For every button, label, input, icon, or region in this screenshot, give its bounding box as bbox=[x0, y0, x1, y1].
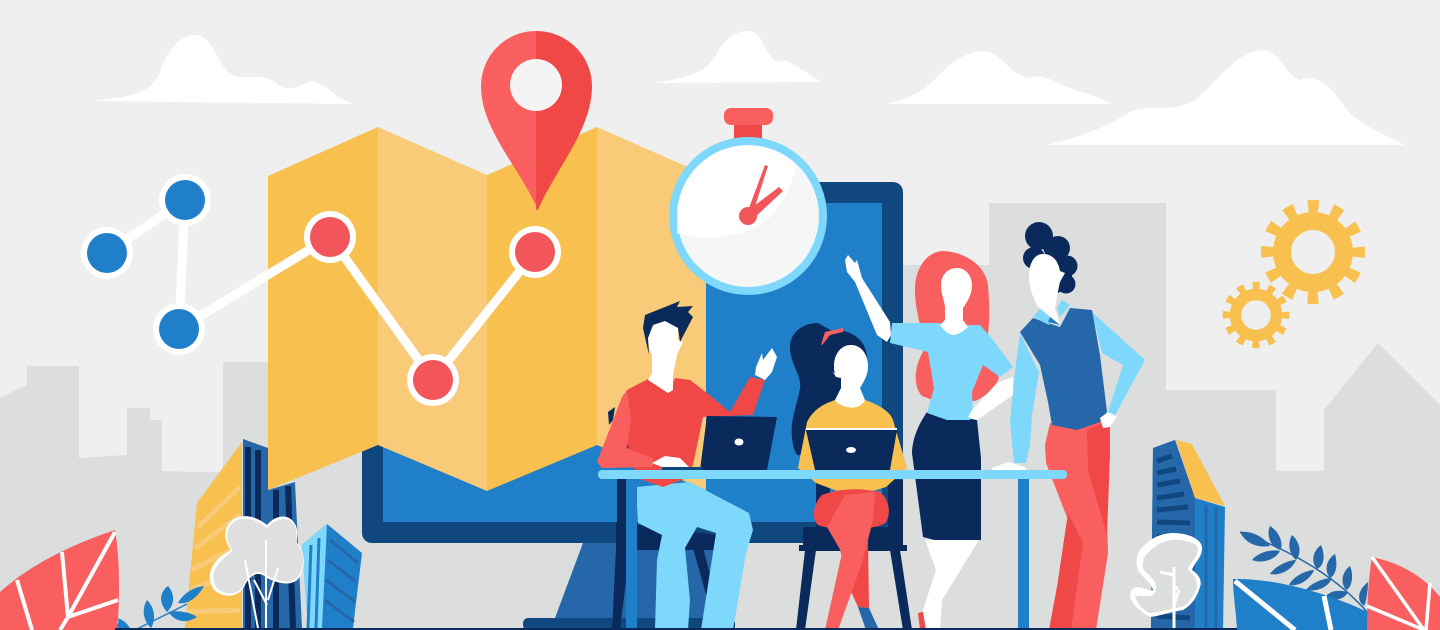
sweater bbox=[627, 377, 765, 487]
person: standing woman bbox=[845, 251, 1013, 630]
left red leaf bbox=[0, 530, 119, 630]
neck and face bbox=[648, 321, 683, 393]
left buildings bbox=[185, 439, 362, 628]
lap bbox=[814, 489, 889, 529]
sweater bbox=[890, 323, 1013, 420]
collar bbox=[1033, 306, 1052, 325]
left sprig bbox=[115, 586, 204, 630]
right red leaf bbox=[1367, 557, 1440, 630]
hair bbox=[790, 323, 867, 455]
hair bbox=[643, 301, 693, 355]
gears bbox=[1226, 206, 1358, 344]
legs bbox=[923, 540, 979, 630]
person: standing man bbox=[992, 222, 1145, 630]
face bbox=[833, 345, 868, 408]
hand bbox=[755, 348, 777, 380]
raised arm bbox=[845, 255, 891, 342]
right tree bbox=[1130, 533, 1202, 628]
headband bbox=[821, 328, 843, 345]
location pin bbox=[481, 31, 592, 210]
face and neck bbox=[940, 268, 972, 335]
shirt arms bbox=[1010, 333, 1039, 463]
right sprig bbox=[1240, 526, 1368, 613]
lower arm bbox=[968, 377, 1013, 420]
table bbox=[598, 470, 1067, 630]
folded map bbox=[268, 127, 706, 491]
clouds bbox=[93, 31, 1405, 145]
vest bbox=[1020, 308, 1107, 430]
hair bbox=[1023, 222, 1078, 294]
shoe bbox=[918, 612, 926, 630]
laptop bbox=[700, 416, 777, 470]
hands bbox=[1100, 412, 1117, 428]
face bbox=[1029, 254, 1065, 325]
stopwatch bbox=[669, 108, 827, 295]
shoe bbox=[858, 607, 879, 630]
city skyline background bbox=[0, 203, 1440, 630]
chair bbox=[796, 480, 912, 630]
person: seated woman bbox=[790, 323, 912, 630]
left tree bbox=[210, 516, 304, 628]
skirt bbox=[912, 412, 981, 542]
hair bbox=[915, 251, 999, 401]
left arm bbox=[597, 390, 653, 468]
pants bbox=[1045, 420, 1110, 630]
laptop bbox=[806, 428, 897, 430]
front leg bbox=[825, 492, 875, 630]
hand on table bbox=[652, 456, 689, 467]
chair bbox=[608, 407, 735, 630]
right blue leaf bbox=[1233, 579, 1368, 630]
legs bbox=[636, 482, 753, 630]
shirt bbox=[798, 400, 907, 497]
ground line bbox=[115, 628, 1237, 630]
right tower bbox=[1151, 440, 1225, 630]
back leg bbox=[835, 528, 869, 608]
monitor bbox=[362, 182, 903, 630]
person: seated man bbox=[597, 301, 777, 630]
route network chart bbox=[81, 174, 561, 406]
